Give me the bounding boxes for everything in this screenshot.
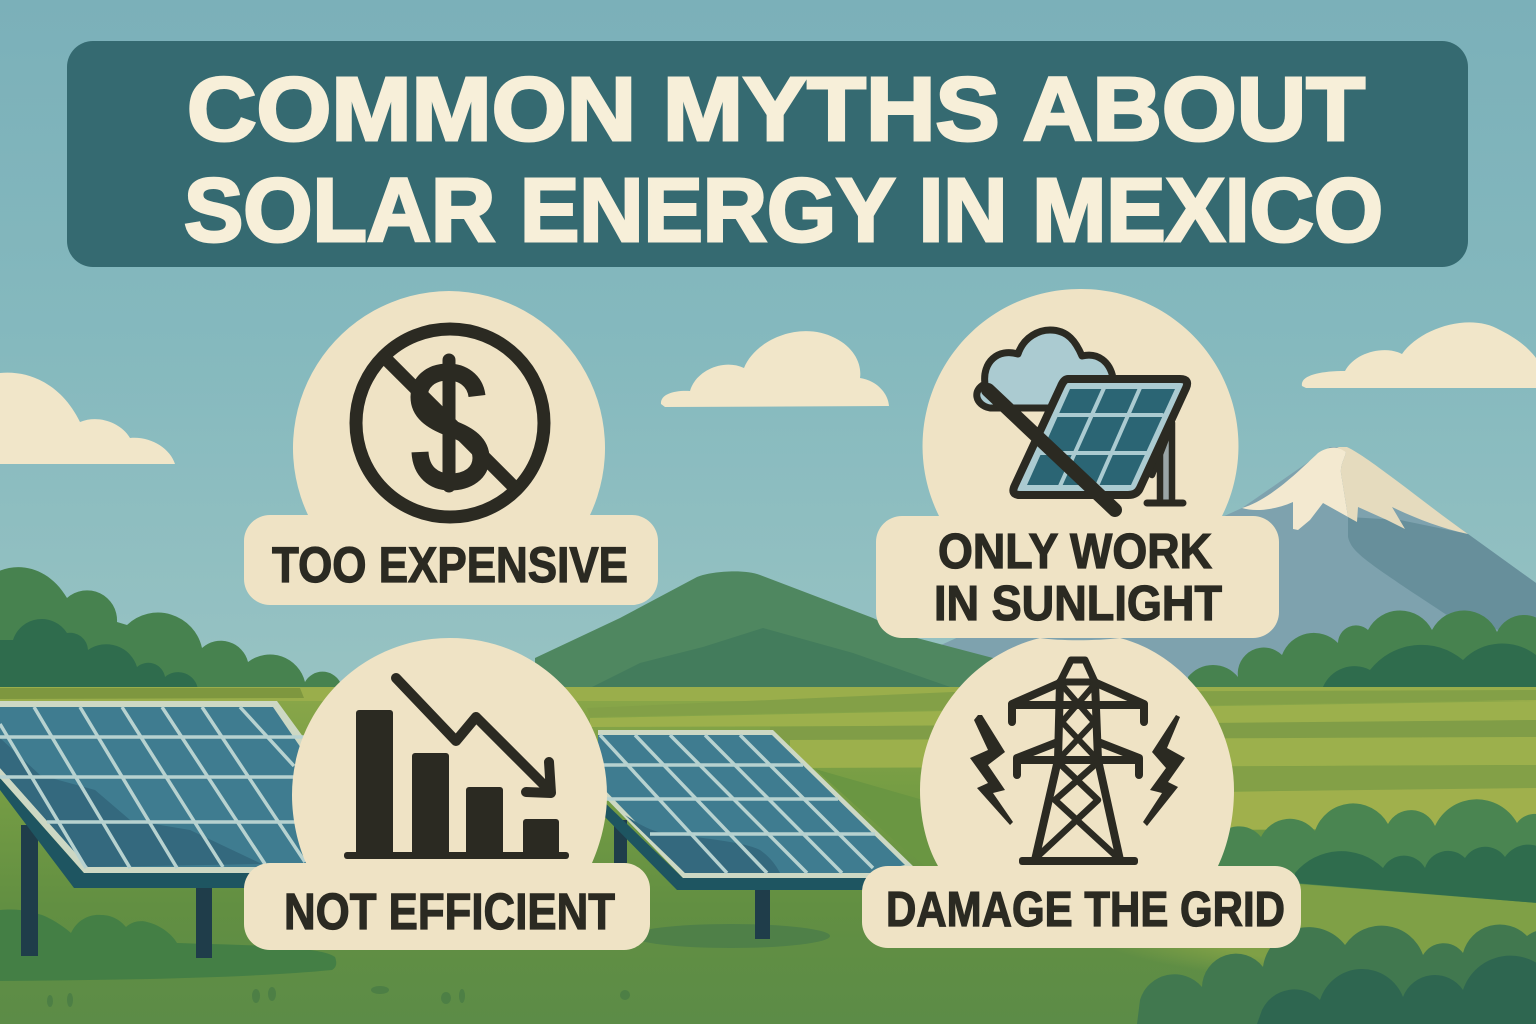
label: not efficient: NOT EFFICIENT: [284, 883, 615, 940]
bushes: bottom right corner: [1137, 925, 1536, 1024]
badge: not efficient: [244, 638, 650, 950]
mountain: snow-capped volcano: [930, 447, 1536, 690]
icon: falling bar chart: [344, 678, 569, 859]
panel grid: [0, 707, 305, 868]
badge shape: [862, 638, 1301, 948]
snow cap lit side: [1242, 448, 1357, 530]
badge shape: [244, 638, 650, 950]
panel frame: [0, 701, 320, 873]
label: too expensive: TOO EXPENSIVE: [272, 537, 628, 593]
bushes: lower right: [1215, 799, 1536, 904]
bushes: far right tree line: [1188, 610, 1536, 690]
snow cap shaded side: [1337, 447, 1468, 534]
title: line 1: COMMON MYTHS ABOUT: [187, 60, 1365, 160]
badge: too expensive: [244, 291, 658, 605]
panel frame: [598, 730, 915, 878]
shadow: left panel bush: [0, 909, 336, 981]
panel underside: [598, 796, 880, 890]
title: line 2: SOLAR ENERGY IN MEXICO: [184, 161, 1383, 261]
label: damage the grid: DAMAGE THE GRID: [886, 883, 1285, 937]
bolt left: [970, 715, 1013, 825]
panel legs: [21, 825, 212, 958]
bolt right: [1143, 715, 1185, 826]
solar panel: right: [598, 730, 915, 939]
field: ground: [0, 687, 1536, 1024]
grass tufts: [47, 986, 630, 1007]
icon: cloud, solar panel, slash: [977, 330, 1187, 510]
bushes: far left tree line: [0, 567, 340, 690]
badge: damage the grid: [862, 638, 1301, 948]
hill: centre green: [535, 571, 993, 690]
label: in sunlight: IN SUNLIGHT: [934, 577, 1222, 631]
panel grid: [598, 735, 875, 873]
badge shape: [244, 291, 658, 605]
badge shape: [876, 289, 1279, 638]
label: only work: ONLY WORK: [938, 525, 1212, 579]
cloud: right: [1302, 322, 1536, 388]
badge: only work in sunlight: [876, 289, 1279, 638]
title banner: [67, 41, 1468, 267]
panel cells: [0, 707, 316, 867]
cloud: left: [0, 373, 175, 464]
cloud: centre: [661, 331, 889, 407]
icon: crossed out dollar: [356, 329, 544, 517]
shadow: right panel: [632, 924, 830, 948]
panel underside: [0, 778, 262, 888]
panel legs: [614, 820, 770, 939]
icon: pylon with lightning: [970, 660, 1185, 865]
solar panel: left: [0, 701, 320, 958]
panel cells: [598, 735, 905, 873]
background: sky: [0, 0, 1536, 700]
